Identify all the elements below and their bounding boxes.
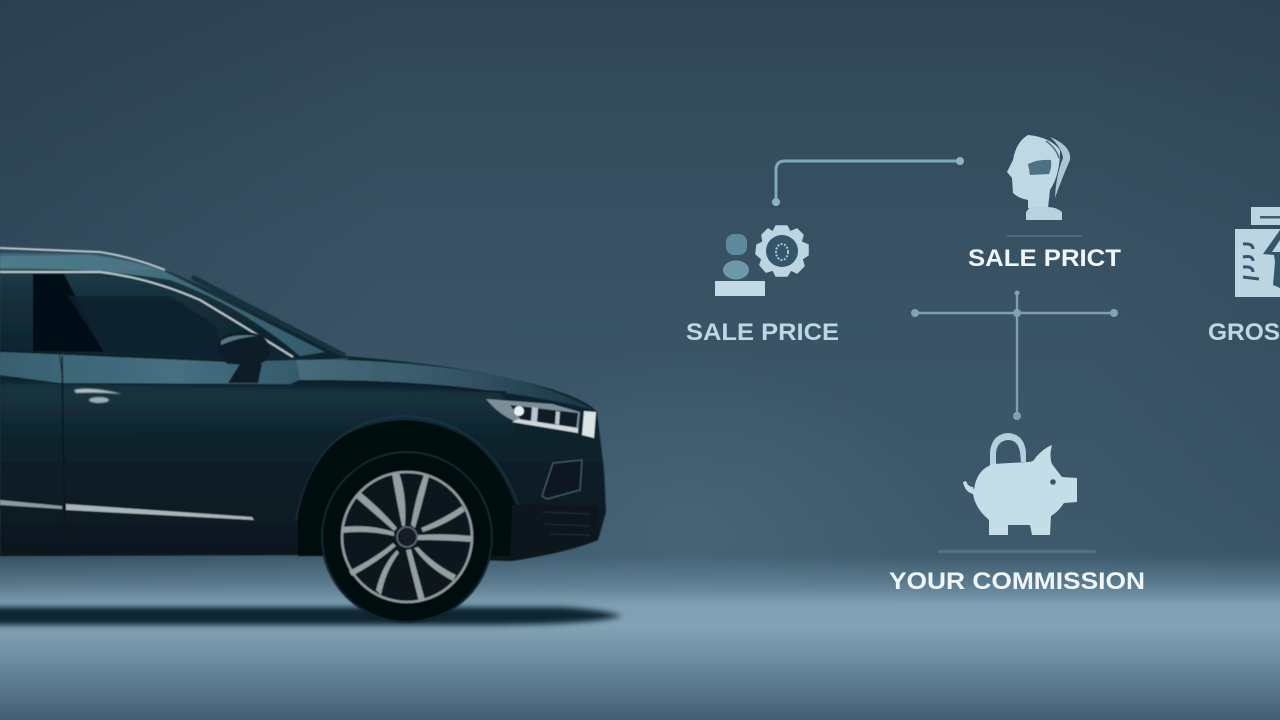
roof rail [0,248,165,270]
side sill chrome strip [0,500,254,520]
windscreen dark edge [192,277,345,356]
door handle [74,389,122,403]
headlight [486,399,596,438]
wheel arch [298,420,516,558]
label: sale price centre: SALE PRICT [968,245,1121,272]
windows [0,274,280,359]
side mirror [218,332,270,383]
icon: person with gear [715,226,808,296]
hood [296,360,594,410]
car ground shadow [0,607,622,625]
front fog lamp [542,460,582,499]
icon: piggy bank [963,433,1077,535]
roof panel [0,255,325,356]
connector: cross to your commission [911,290,1118,420]
lower door sheen [0,384,520,445]
studio floor [0,555,1280,720]
underline: your commission [938,550,1096,553]
belt line panel [0,352,350,384]
connector: sale price to person icon [772,157,964,206]
label: your commission: YOUR COMMISSION [889,568,1145,595]
front wheel [321,451,493,623]
icon: document with arrow [1235,207,1280,297]
window frame chrome [0,272,293,357]
car body [0,256,606,561]
car: dark SUV, front three-quarter cropped at the left edge [0,248,606,623]
label: sale price left: SALE PRICE [686,319,839,346]
lower bumper [510,504,598,560]
door seam [62,356,65,553]
underline: sale price centre [1007,235,1082,237]
icon: head profile [1007,135,1070,220]
